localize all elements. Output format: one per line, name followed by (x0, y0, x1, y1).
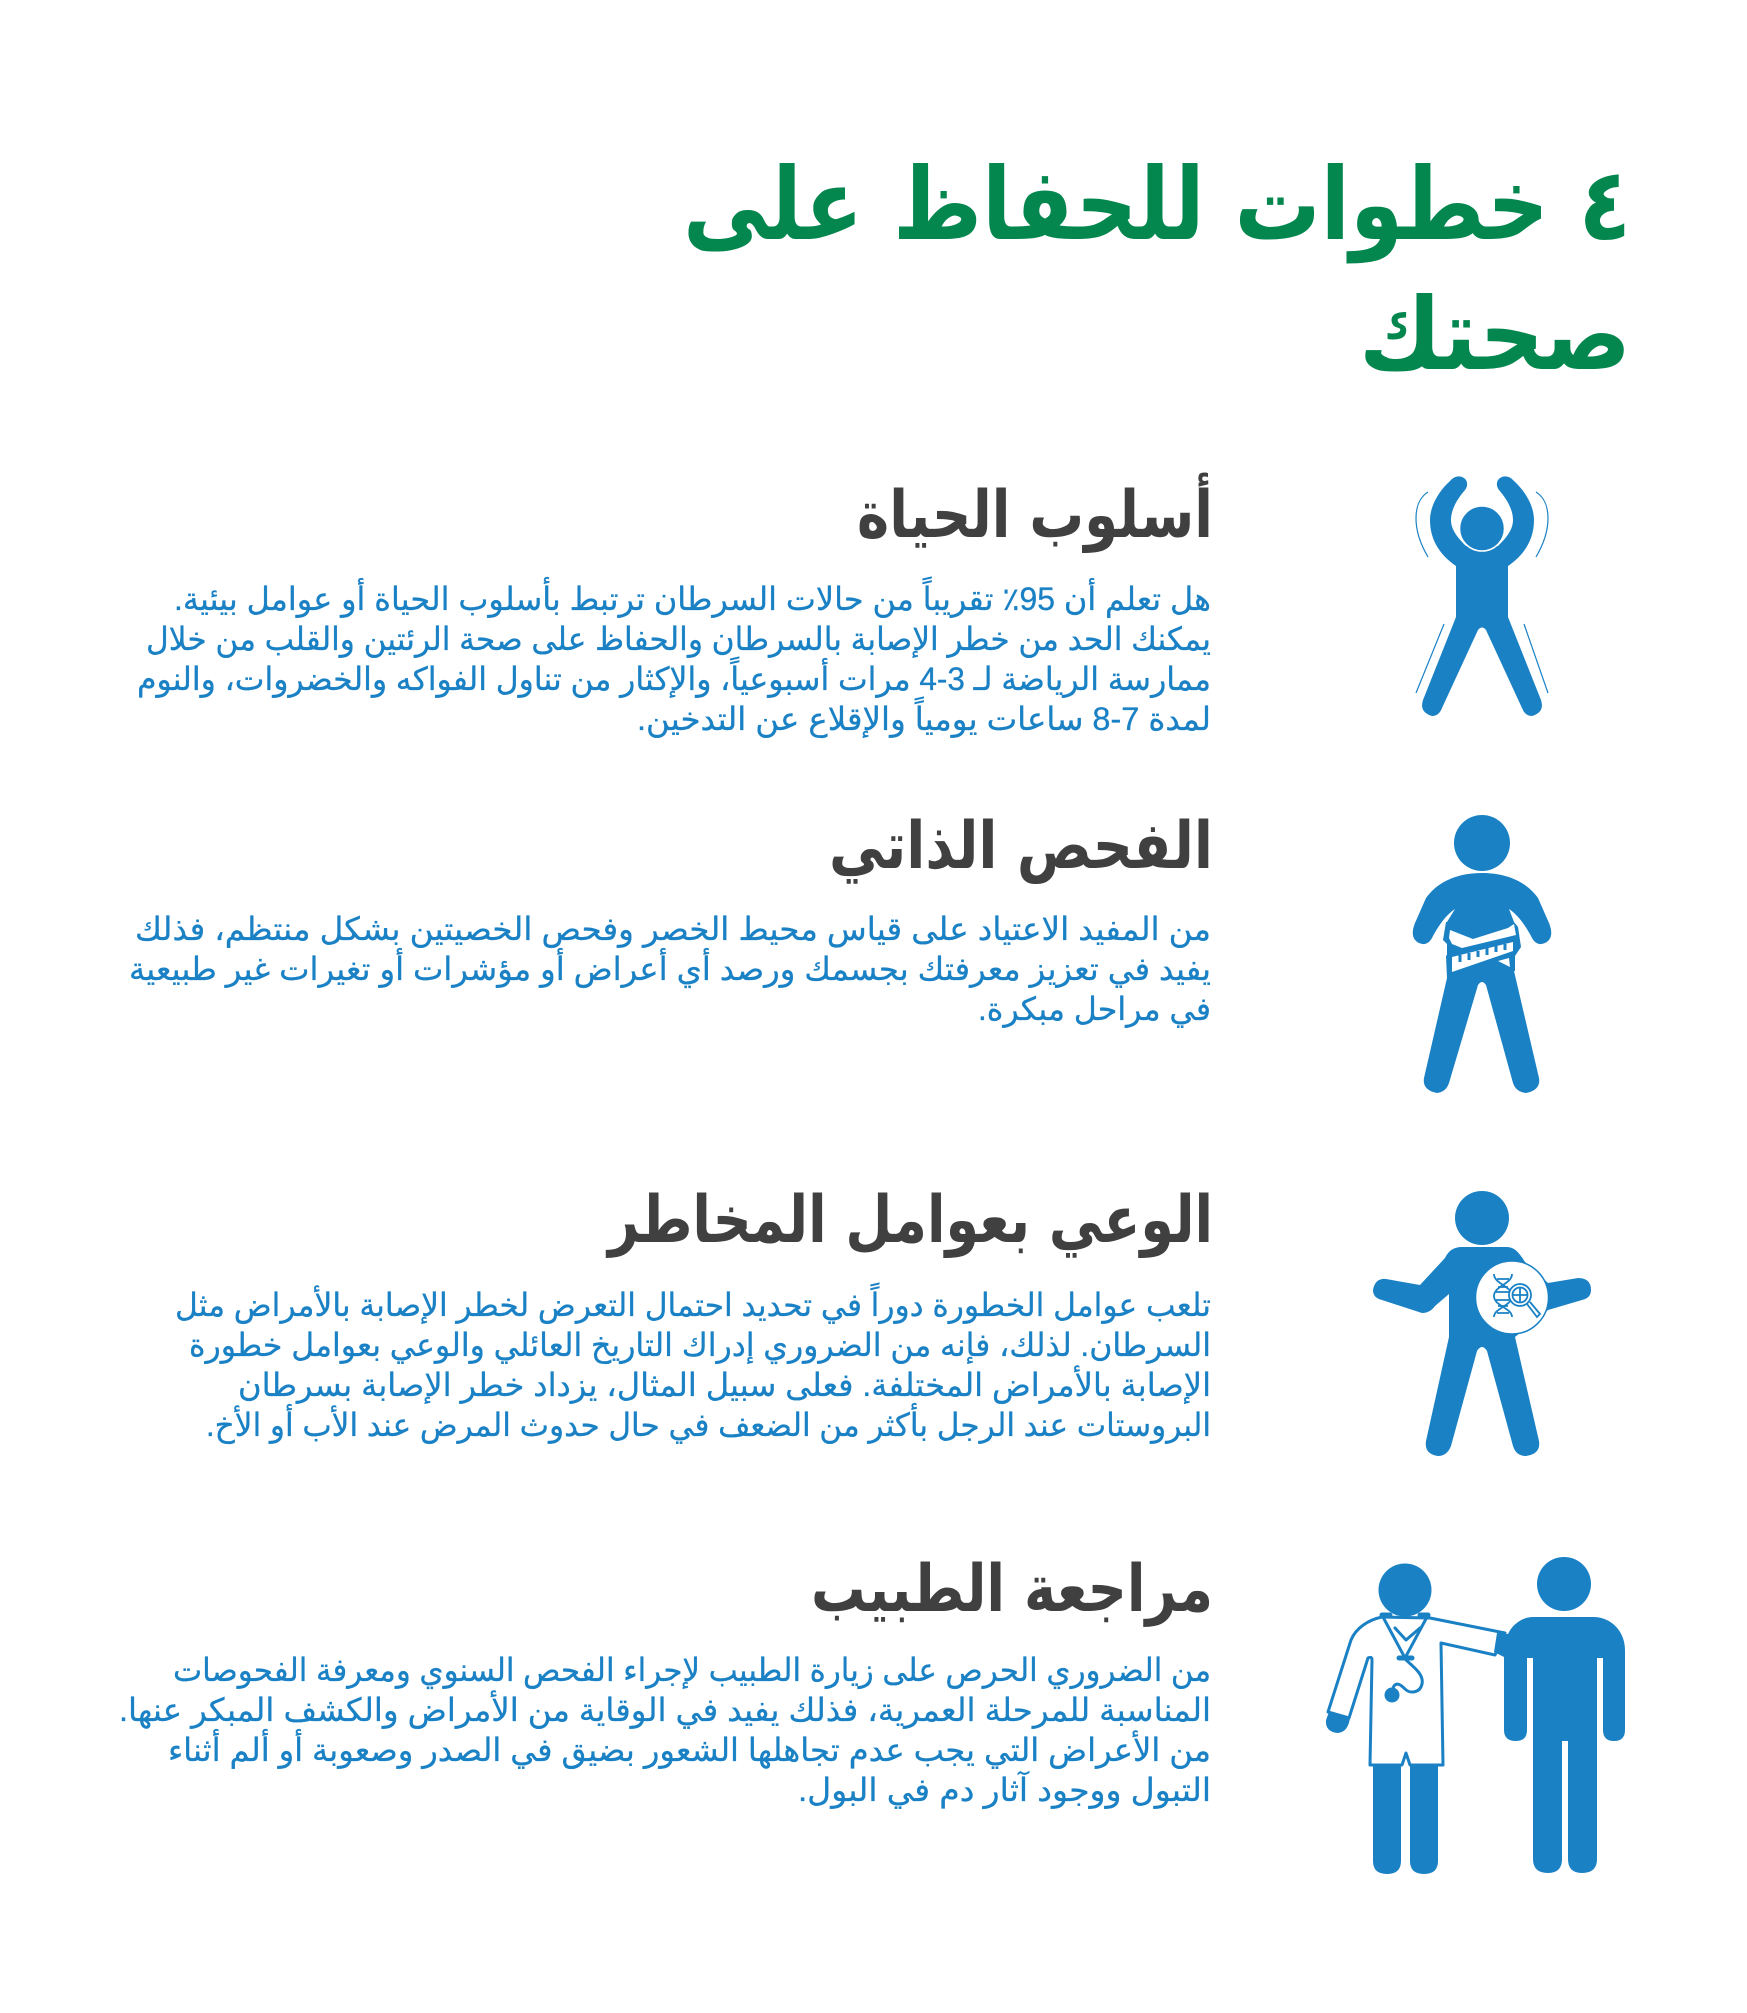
text block: risk factors: تلعب عوامل الخطورة دوراً في تحديد احتمال التعرض لخطر الإصابة بالأمراض مثل (175, 1282, 1211, 1324)
text block: self examination: من المفيد الاعتياد على قياس محيط الخصر وفحص الخصيتين بشكل منتظم، فذلك (135, 911, 1211, 948)
panel: self examination (129, 809, 1551, 1093)
icon: figure with DNA magnifier (1373, 1191, 1591, 1456)
text block: see the doctor: التبول ووجود آثار دم في البول. (798, 1770, 1211, 1809)
heading: self examination: الفحص الذاتي (829, 809, 1213, 884)
text block: risk factors (175, 1282, 1211, 1444)
heading: risk factors: الوعي بعوامل المخاطر (606, 1183, 1213, 1258)
text block: lifestyle: لمدة 7-8 ساعات يومياً والإقلاع عن التدخين. (637, 696, 1211, 738)
panel: see the doctor (119, 1552, 1625, 1874)
icon: jumping figure (1416, 476, 1548, 716)
text block: self examination: يفيد في تعزيز معرفتك بجسمك ورصد أي أعراض أو مؤشرات أو تغيرات غير طبيعية (129, 948, 1211, 988)
text block: lifestyle (137, 576, 1211, 738)
text block: lifestyle: يمكنك الحد من خطر الإصابة بالسرطان والحفاظ على صحة الرئتين والقلب من خلال (146, 621, 1211, 658)
text block: risk factors: الإصابة بالأمراض المختلفة. فعلى سبيل المثال، يزداد خطر الإصابة بسرطان (238, 1365, 1211, 1404)
text block: self examination: في مراحل مبكرة. (978, 991, 1211, 1028)
title: صحتك (1359, 276, 1631, 393)
heading: see the doctor: مراجعة الطبيب (811, 1552, 1213, 1627)
text block: see the doctor: من الضروري الحرص على زيارة الطبيب لإجراء الفحص السنوي ومعرفة الفحوصات (173, 1652, 1211, 1689)
panel: risk factors (175, 1183, 1591, 1456)
icon: patient (1494, 1557, 1625, 1873)
text block: risk factors: البروستات عند الرجل بأكثر من الضعف في حال حدوث المرض عند الأب أو الأخ. (206, 1403, 1211, 1444)
title (683, 146, 1631, 393)
icon: doctor and patient (1326, 1557, 1625, 1874)
text block: self examination (129, 911, 1211, 1028)
text block: see the doctor: من الأعراض التي يجب عدم تجاهلها الشعور بضيق في الصدر وصعوبة أو ألم أثناء (168, 1729, 1211, 1769)
title: ٤ خطوات للحفاظ على (683, 146, 1631, 264)
text block: see the doctor (119, 1652, 1211, 1809)
text block: see the doctor: المناسبة للمرحلة العمرية، فذلك يفيد في الوقاية من الأمراض والكشف المبكر عنها. (119, 1690, 1211, 1729)
icon: figure with measuring tape (1413, 815, 1551, 1093)
heading: lifestyle: أسلوب الحياة (857, 472, 1213, 553)
icon: doctor (1326, 1564, 1505, 1874)
panel: lifestyle (137, 472, 1548, 738)
text block: risk factors: السرطان. لذلك، فإنه من الضروري إدراك التاريخ العائلي والوعي بعوامل خطورة (189, 1327, 1211, 1364)
text block: lifestyle: ممارسة الرياضة لـ 3-4 مرات أسبوعياً، والإكثار من تناول الفواكه والخضروات، والنوم (137, 656, 1211, 698)
text block: lifestyle: هل تعلم أن 95٪ تقريباً من حالات السرطان ترتبط بأسلوب الحياة أو عوامل بيئية. (174, 576, 1211, 618)
